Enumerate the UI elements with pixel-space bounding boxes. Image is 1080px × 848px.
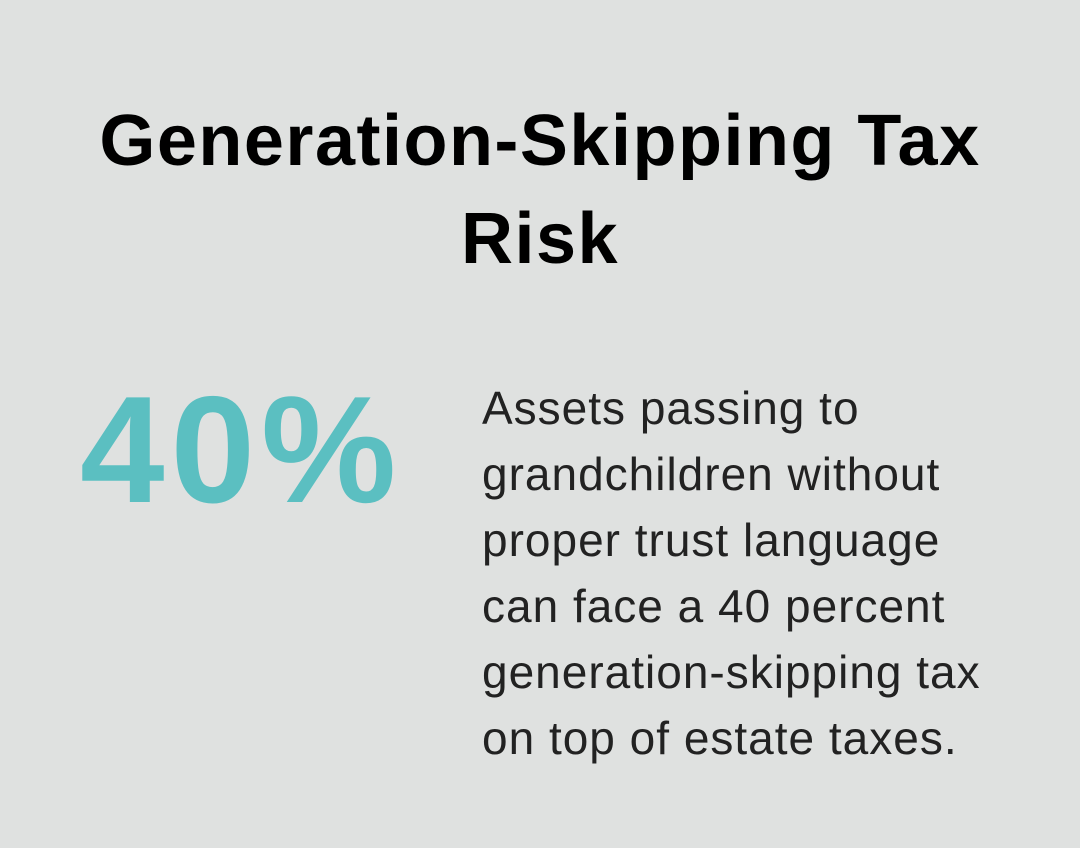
title: Risk — [461, 199, 619, 279]
title: Generation-Skipping Tax — [99, 101, 981, 181]
title — [99, 101, 981, 279]
big statistic: 40% — [80, 365, 402, 535]
description text: grandchildren without — [482, 448, 940, 500]
description text: Assets passing to — [482, 382, 860, 434]
description text: generation-skipping tax — [482, 646, 981, 698]
description text: proper trust language — [482, 514, 940, 566]
description text: can face a 40 percent — [482, 580, 945, 632]
description text: on top of estate taxes. — [482, 712, 958, 764]
description text — [482, 382, 981, 764]
